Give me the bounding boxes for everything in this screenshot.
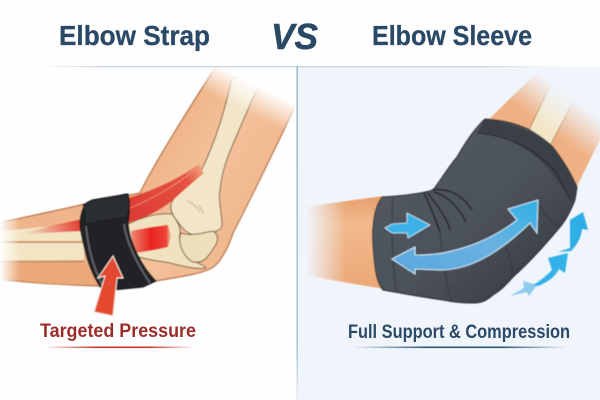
caption: Targeted Pressure: Targeted Pressure: [40, 321, 196, 342]
arrow: large curved double arrow: [392, 200, 538, 274]
muscle: inflamed red block: [131, 225, 171, 253]
bone: humerus: [171, 78, 262, 235]
heading: Elbow Strap: Elbow Strap: [59, 20, 210, 51]
heading: VS: VS: [271, 16, 318, 57]
bone: elbow joint: [128, 214, 206, 268]
bone: humerus visible above sleeve: [530, 88, 570, 144]
arm and bones with faded ends: [0, 68, 303, 286]
arrow: outer curved chevrons: [510, 212, 588, 296]
underline: Targeted Pressure: [44, 346, 194, 348]
elbow strap: [80, 194, 156, 291]
panel: elbow sleeve background: [298, 67, 600, 400]
panel: elbow sleeve illustration: [306, 60, 600, 303]
compression sleeve: [373, 119, 577, 303]
panel: elbow strap illustration: [0, 68, 303, 316]
divider: horizontal rule: [40, 66, 560, 67]
muscle: extensor tendon band: [127, 164, 204, 223]
bone: forearm radius and ulna: [0, 223, 84, 241]
arrow: targeted pressure: [94, 256, 123, 316]
divider: vertical rule: [296, 66, 298, 400]
underline: Full Support & Compression: [352, 346, 567, 348]
arrow: small straight arrow: [385, 213, 430, 238]
arm and bone with faded ends: [306, 60, 600, 289]
heading: Elbow Sleeve: Elbow Sleeve: [372, 20, 532, 51]
caption: Full Support & Compression: Full Support & Compression: [348, 322, 570, 343]
muscle: forearm fade: [25, 219, 82, 234]
